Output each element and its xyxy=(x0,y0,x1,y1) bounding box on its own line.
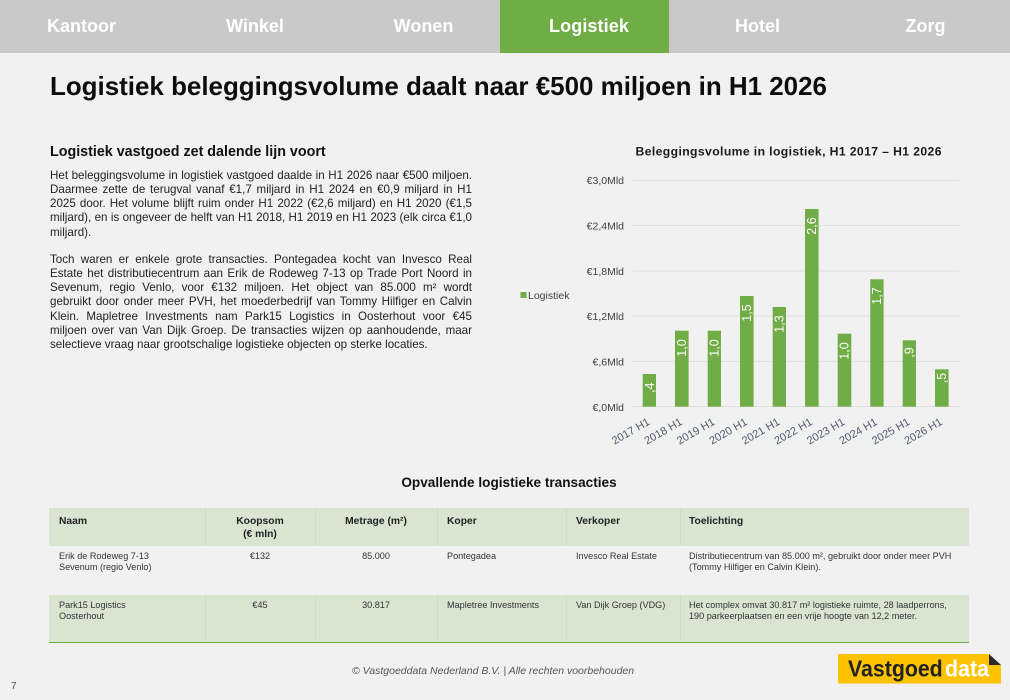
table heading: Opvallende logistieke transacties xyxy=(401,475,617,490)
bar value labels xyxy=(643,217,949,393)
x axis labels: 2018 H1 xyxy=(642,416,684,447)
text block: paragraph 2: selectieve vraag naar grootschalige logistieke objecten op sterke locaties. xyxy=(50,338,428,351)
bar value labels: ,9 xyxy=(902,347,916,358)
row 2: naam xyxy=(59,600,126,621)
x axis labels: 2021 H1 xyxy=(740,416,782,447)
row 2: metrage: 30.817 xyxy=(362,600,390,610)
chart title: Beleggingsvolume in logistiek, H1 2017 – H1 2026 xyxy=(636,144,942,158)
text block: paragraph 2: Klein. Mapletree Investments nam Park15 Logistics in Oosterhout voor €45 xyxy=(50,310,472,323)
header: Verkoper: Verkoper xyxy=(576,516,620,526)
y axis labels: €3,0Mld xyxy=(587,175,624,187)
bar value labels: ,4 xyxy=(643,382,657,393)
text block: paragraph 2: Sevenum, regio Venlo, voor €132 miljoen. Het object van 85.000 m² wordt xyxy=(50,281,472,294)
tab: Kantoor: Kantoor xyxy=(47,16,116,36)
text block: paragraph 1: miljard), en is ongeveer de helft van H1 2018, H1 2019 en H1 2023 (elk circa €1,0 xyxy=(50,211,472,224)
y axis labels: €1,2Mld xyxy=(587,311,624,323)
text block: paragraph 1: miljard). xyxy=(50,226,91,239)
row 1: koopsom: €132 xyxy=(250,551,270,561)
row 1: koper: Pontegadea xyxy=(447,551,496,561)
row 2: toelichting: 190 parkeerplaatsen en een vrije hoogte van 12,2 meter. xyxy=(689,611,917,621)
text block: paragraph 2: gebruikt door onder meer PVH, het moederbedrijf van Tommy Hilfiger en Calvin xyxy=(50,295,472,308)
bar value labels: 1,7 xyxy=(870,287,884,305)
navigation bar xyxy=(0,0,1010,53)
logo: Vastgoeddata: Vastgoed xyxy=(848,656,943,682)
x axis labels: 2020 H1 xyxy=(707,416,750,447)
row 2: toelichting: Het complex omvat 30.817 m² logistieke ruimte, 28 laadperrons, xyxy=(689,600,947,610)
bar value labels: 1,0 xyxy=(708,339,722,357)
x axis labels xyxy=(610,416,944,447)
tab: Logistiek (active) xyxy=(500,0,669,53)
row 1: toelichting: Distributiecentrum van 85.000 m², gebruikt door onder meer PVH xyxy=(689,551,951,561)
text block: paragraph 2 xyxy=(50,253,472,351)
row 1: naam xyxy=(59,551,152,572)
bar value labels: 1,3 xyxy=(772,315,786,333)
row 1: verkoper: Invesco Real Estate xyxy=(576,551,657,561)
logo: Vastgoeddata: data xyxy=(945,656,990,682)
y axis labels xyxy=(587,175,624,414)
header: Toelichting: Toelichting xyxy=(689,516,743,526)
tab: Wonen: Wonen xyxy=(394,16,453,36)
row 2: koper: Mapletree Investments xyxy=(447,600,539,610)
header: Koopsom: (€ mln) xyxy=(243,528,277,540)
row 2: toelichting xyxy=(689,600,947,621)
bar value labels: 1,0 xyxy=(838,342,852,360)
header: Koopsom xyxy=(236,516,284,540)
x axis labels: 2024 H1 xyxy=(837,416,880,447)
text block: paragraph 1 xyxy=(50,169,472,239)
y axis labels: €1,8Mld xyxy=(587,266,624,278)
tab: Winkel: Winkel xyxy=(226,16,284,36)
title: Logistiek beleggingsvolume daalt naar €500 miljoen in H1 2026 xyxy=(50,73,827,101)
y axis labels: €,0Mld xyxy=(592,402,624,414)
x axis labels: 2019 H1 xyxy=(675,416,717,447)
row 1: naam: Sevenum (regio Venlo) xyxy=(59,562,152,572)
row 2: koopsom: €45 xyxy=(252,600,268,610)
row 1: naam: Erik de Rodeweg 7-13 xyxy=(59,551,149,561)
bar value labels: 2,6 xyxy=(805,217,819,235)
logo: Vastgoeddata xyxy=(838,654,1001,684)
text block: paragraph 1: 2025 door. Het volume blijft ruim onder H1 2022 (€2,6 miljard) en H1 2020 (€1,5 xyxy=(50,197,472,210)
header: Metrage: Metrage (m²) xyxy=(345,516,407,526)
text block: paragraph 1: Daarmee zette de terugval vanaf €1,7 miljard in H1 2024 en €0,9 miljard in H1 xyxy=(50,183,472,196)
bar chart xyxy=(520,144,959,447)
x axis labels: 2023 H1 xyxy=(805,416,847,447)
table row 2 background xyxy=(49,595,969,643)
y axis labels: €,6Mld xyxy=(592,356,624,368)
bars xyxy=(643,209,949,407)
y axis labels: €2,4Mld xyxy=(587,220,624,232)
bar value labels: ,5 xyxy=(935,373,949,383)
page number: 7 xyxy=(11,681,17,692)
x axis labels: 2017 H1 xyxy=(610,416,652,447)
row 1: toelichting xyxy=(689,551,951,572)
x axis labels: 2022 H1 xyxy=(772,416,814,447)
header: Naam: Naam xyxy=(59,516,87,526)
table header row xyxy=(49,508,969,546)
tab: Logistiek (active): Logistiek xyxy=(549,16,629,36)
text block: paragraph 2: Estate het distributiecentrum aan Erik de Rodeweg 7-13 op Trade Port Noord in xyxy=(50,267,472,280)
row 1: metrage: 85.000 xyxy=(362,551,390,561)
x axis labels: 2025 H1 xyxy=(870,416,912,447)
x axis labels: 2026 H1 xyxy=(902,416,944,447)
text block: paragraph 2: miljoen over van Van Dijk Groep. De transacties wijzen op aanhoudende, maar xyxy=(50,324,472,337)
text block heading: Logistiek vastgoed zet dalende lijn voort xyxy=(50,144,326,160)
text block: paragraph 1: Het beleggingsvolume in logistiek vastgoed daalde in H1 2026 naar €500 miljoen. xyxy=(50,169,472,182)
tab: Hotel: Hotel xyxy=(735,16,780,36)
header: Koper: Koper xyxy=(447,516,477,526)
row 2: naam: Oosterhout xyxy=(59,611,104,621)
header: Koopsom: Koopsom xyxy=(236,516,284,526)
row 2: naam: Park15 Logistics xyxy=(59,600,126,610)
legend: Logistiek xyxy=(528,290,570,302)
row 1: toelichting: (Tommy Hilfiger en Calvin Klein). xyxy=(689,562,821,572)
footer copyright: © Vastgoeddata Nederland B.V. | Alle rechten voorbehouden xyxy=(352,665,634,677)
bar value labels: 1,0 xyxy=(675,339,689,357)
tab: Zorg: Zorg xyxy=(906,16,946,36)
row 2: verkoper: Van Dijk Groep (VDG) xyxy=(576,600,665,610)
bar value labels: 1,5 xyxy=(740,304,754,322)
text block: paragraph 2: Toch waren er enkele grote transacties. Pontegadea kocht van Invesco Real xyxy=(50,253,472,266)
